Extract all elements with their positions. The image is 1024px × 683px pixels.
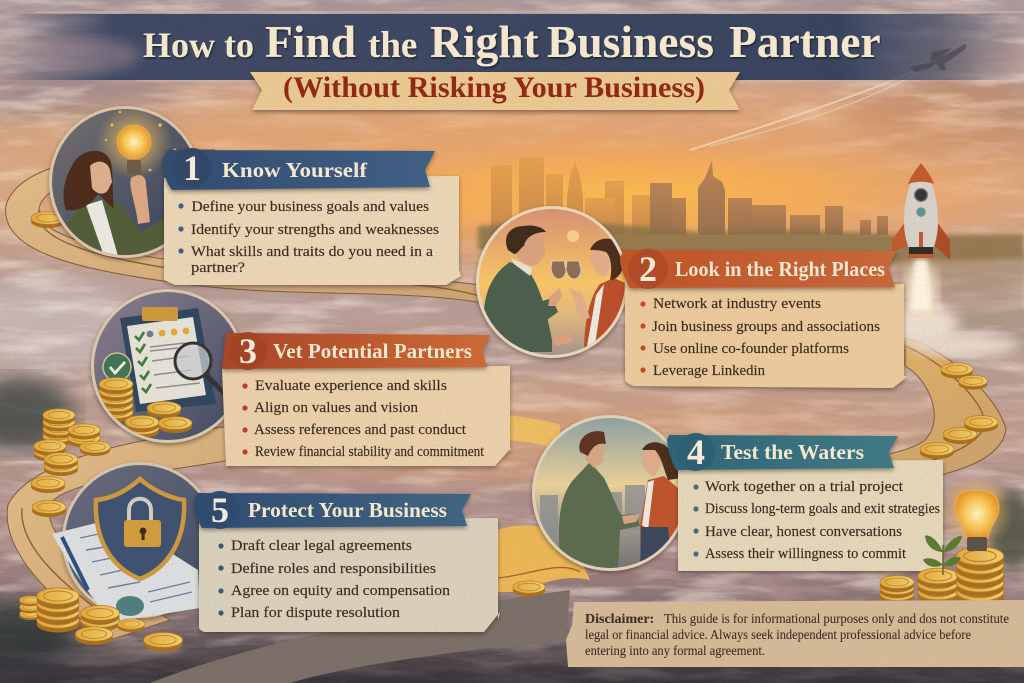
heading banner: step 5: Protect Your Business [248,498,447,522]
heading banner: step 5 [194,490,471,530]
step 3 bullet list: Evaluate experience and skills [255,377,447,394]
title text: Business [547,16,714,67]
subtitle text: (Without Risking Your Business) [283,71,705,104]
step 3 bullet list [242,377,484,460]
disclaimer text: entering into any formal agreement. [585,643,765,658]
panel: step 4 test the waters [667,432,943,571]
disclaimer text: Disclaimer: [585,612,654,627]
heading banner: step 2: Look in the Right Places [675,257,885,281]
heading banner: step 5: 5 [211,490,229,530]
heading banner: step 3: 3 [239,331,257,371]
step 2 bullet list: Leverage Linkedin [653,362,765,379]
step 5 bullet list: Agree on equity and compensation [231,582,450,599]
heading banner: step 4 [667,432,898,472]
circle scene: partners toasting [475,205,630,360]
step 3 bullet list: Align on values and vision [254,399,418,416]
panel: step 3 vet potential partners [222,331,511,466]
title text: How to [143,25,254,65]
title text: Partner [729,16,881,67]
step 4 bullet list [693,478,940,562]
heading banner: step 1 [162,148,435,190]
subtitle ribbon [250,71,740,110]
step 2 bullet list [640,295,880,379]
step 4 bullet list: Discuss long-term goals and exit strategies [705,501,940,517]
circle scene: handshake trial project [532,415,688,572]
step 4 bullet list: Have clear, honest conversations [705,523,902,540]
disclaimer text [585,611,1009,658]
card: step 4 [678,460,943,571]
coin stacks with plant and glowing bulb [880,474,1014,606]
step 2 bullet list: Use online co-founder platforms [653,340,849,357]
circle scene: vetting clipboard [90,288,250,448]
step 4 bullet list: Work together on a trial project [705,478,904,495]
step 1 bullet list: partner? [191,259,245,276]
step 5 bullet list: Draft clear legal agreements [231,537,412,554]
card: step 2 [625,284,908,388]
step 5 bullet list: Define roles and responsibilities [231,560,436,577]
heading banner: step 3 [222,331,490,371]
heading banner: step 1: Know Yourself [222,158,368,182]
heading banner: step 1: 1 [183,148,201,188]
panel: step 2 look in the right places [620,249,908,388]
disclaimer panel [566,600,1024,667]
title text: Right [430,16,539,67]
step 1 bullet list: Define your business goals and values [192,198,429,215]
heading banner: step 4: 4 [687,432,705,472]
heading banner: step 2: 2 [639,249,657,289]
title text: Find [265,16,356,67]
step 3 bullet list: Review financial stability and commitment [255,444,484,460]
panel: step 1 know yourself [162,148,461,285]
heading banner: step 3: Vet Potential Partners [273,339,472,363]
airplane and contrail [690,44,966,150]
city skyline [478,157,1024,326]
step 3 bullet list: Assess references and past conduct [254,421,467,438]
card: step 3 [222,366,511,466]
step 2 bullet list: Network at industry events [653,295,821,312]
rocket with exhaust [883,163,1020,357]
step 2 bullet list: Join business groups and associations [652,318,880,335]
title banner [0,12,1024,81]
circle scene: shield and legal document [52,460,220,622]
card: step 5 [199,518,500,632]
heading banner: step 2 [620,249,897,289]
step 4 bullet list: Assess their willingness to commit [705,545,907,562]
step 1 bullet list: Identify your strengths and weaknesses [191,221,439,238]
disclaimer text: This guide is for informational purposes only and dos not constitute [664,611,1009,626]
title text: the [368,25,417,66]
panel: step 5 protect your business [194,490,500,632]
gold coins along the path [31,212,998,596]
winding gold road [6,150,1006,640]
step 1 bullet list: What skills and traits do you need in a [191,243,433,260]
heading banner: step 4: Test the Waters [721,440,864,464]
card: step 1 [164,176,461,285]
circle scene: woman with idea bulb [45,104,205,265]
step 5 bullet list: Plan for dispute resolution [231,604,400,621]
step 1 bullet list [178,198,439,276]
step 5 bullet list [218,537,450,621]
disclaimer text: legal or financial advice. Always seek independent professional advice before [585,627,971,642]
coins beside the document [19,588,183,652]
